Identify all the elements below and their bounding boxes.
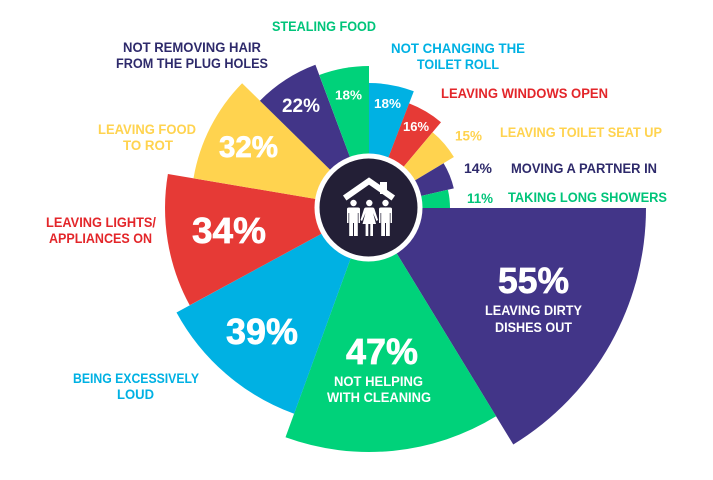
label: not changing the toilet roll: NOT CHANGING THE [391, 41, 525, 56]
label: leaving food to rot: LEAVING FOOD [98, 122, 196, 137]
icon: house roof [345, 181, 393, 198]
label: 14% moving a partner in: MOVING A PARTNER IN [511, 161, 657, 176]
sector: leaving windows open 16%: 16% [403, 119, 429, 134]
label: being excessively loud [73, 371, 199, 402]
icon: man right [379, 200, 392, 236]
sector: moving a partner in 14% [369, 163, 454, 208]
label: stealing food: STEALING FOOD [272, 19, 376, 34]
label: leaving lights / appliances on: APPLIANCES ON [49, 231, 152, 246]
label: being excessively loud: BEING EXCESSIVELY [73, 371, 199, 386]
icon: woman centre [360, 200, 378, 236]
sector: stealing food 18%: 18% [335, 88, 362, 102]
sector: taking long showers 11% [369, 190, 450, 208]
sector: leaving dirty dishes out 55%: DISHES OUT [495, 320, 573, 335]
sector: stealing food 18% [319, 66, 369, 208]
sector: being excessively loud 39%: 39% [226, 311, 298, 352]
sector: leaving windows open 16% [369, 103, 441, 208]
label: leaving lights / appliances on [46, 215, 156, 246]
sector: not helping with cleaning 47%: NOT HELPING [334, 374, 423, 389]
label: 11% taking long showers: 11% [467, 190, 494, 206]
sector: leaving dirty dishes out 55%: 55% [498, 260, 569, 301]
label: leaving food to rot: TO ROT [123, 138, 174, 153]
sector: leaving lights on 34% [165, 174, 369, 305]
sector: not helping with cleaning 47% [286, 208, 496, 452]
label: leaving lights / appliances on: LEAVING LIGHTS/ [46, 215, 156, 230]
label: being excessively loud: LOUD [117, 387, 154, 402]
label: 11% taking long showers: TAKING LONG SHOWERS [508, 190, 667, 205]
sector: not removing hair 22% [260, 65, 369, 208]
label: not removing hair from the plug holes: FROM THE PLUG HOLES [116, 56, 268, 71]
label: 15% leaving toilet seat up [455, 125, 662, 144]
sector: not helping with cleaning 47%: 47% [346, 331, 418, 372]
label: leaving windows open: LEAVING WINDOWS OPEN [441, 86, 608, 101]
sector: leaving toilet seat up 15% [369, 132, 454, 208]
sector: leaving food to rot 32% [194, 83, 369, 208]
sector: not changing the toilet roll 18% [369, 83, 414, 208]
label: not removing hair from the plug holes [116, 40, 268, 71]
sector: not changing the toilet roll 18%: 18% [374, 96, 401, 111]
label: leaving food to rot [98, 122, 196, 153]
sector: leaving dirty dishes out 55% [369, 208, 646, 444]
sector: being excessively loud 39% [176, 208, 369, 414]
sector: leaving food to rot 32%: 32% [219, 131, 278, 164]
label: not changing the toilet roll [391, 41, 525, 72]
sector: leaving lights on 34%: 34% [192, 210, 266, 251]
label: 14% moving a partner in: 14% [464, 160, 493, 176]
label: not removing hair from the plug holes: NOT REMOVING HAIR [123, 40, 261, 55]
label: 15% leaving toilet seat up: LEAVING TOILET SEAT UP [500, 125, 662, 140]
label: 14% moving a partner in [464, 160, 657, 176]
sector: not removing hair 22%: 22% [282, 96, 320, 117]
center badge: house and family icon [314, 154, 422, 262]
label: 15% leaving toilet seat up: 15% [455, 128, 483, 144]
sector: leaving dirty dishes out 55%: LEAVING DIRTY [485, 303, 582, 318]
label: not changing the toilet roll: TOILET ROLL [417, 57, 499, 72]
icon: man left [347, 200, 360, 236]
sector: not helping with cleaning 47%: WITH CLEANING [327, 390, 431, 405]
